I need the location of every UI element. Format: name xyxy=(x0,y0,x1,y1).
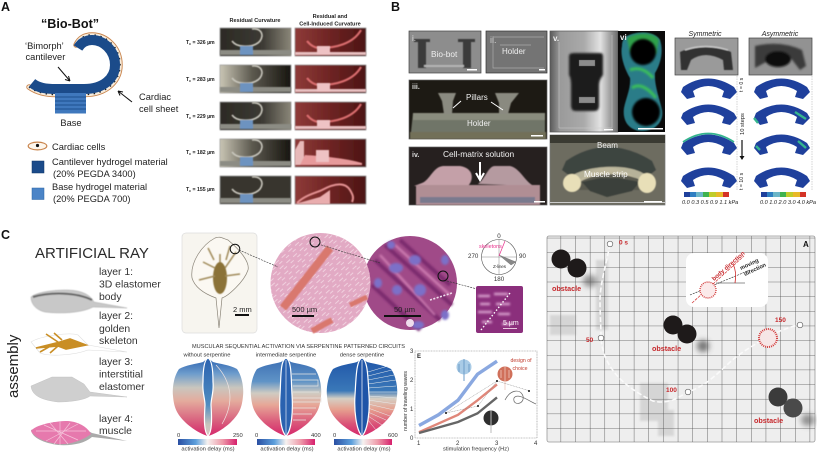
shaded trail xyxy=(550,260,674,436)
photo iv: cell-matrix solution: iv. xyxy=(412,152,419,159)
obstacle bottom right xyxy=(754,388,815,426)
layer 3 text: layer 3: xyxy=(99,357,133,368)
annotation: design of choice: design of xyxy=(510,358,532,364)
time axis labels and arrow xyxy=(737,76,812,190)
row labels: c xyxy=(189,42,191,46)
layer 1 text: body xyxy=(99,292,122,303)
panel letter B: B xyxy=(391,0,400,14)
label: bimorph cantilever: ‘Bimorph’ xyxy=(25,41,64,51)
column heading: residual and cell-induced curvature: Cell-Induced Curvature xyxy=(299,22,361,28)
time axis labels and arrow: t = 0 s xyxy=(739,77,745,92)
panel: C artificial ray assembly xyxy=(1,228,161,445)
row labels: T xyxy=(186,77,189,83)
icon: cantilever swatch xyxy=(32,161,44,173)
label: assembly: assembly xyxy=(5,334,22,398)
time labels xyxy=(586,240,786,394)
label: cardiac cell sheet: cell sheet xyxy=(139,104,179,114)
row labels: = 182 µm xyxy=(191,150,215,156)
icon: dark ray xyxy=(484,410,498,433)
arrow to cantilever xyxy=(58,67,70,81)
row labels: c xyxy=(189,189,191,193)
map: dense serpentine xyxy=(327,358,397,436)
polar plot: 270 xyxy=(468,253,479,260)
chart label E: E xyxy=(417,354,421,360)
icon: base swatch xyxy=(32,188,44,200)
panel: A bio-bot diagram xyxy=(1,0,179,204)
panel letter C: C xyxy=(1,228,10,242)
axis tick labels: 4 xyxy=(534,441,538,447)
subheading: without serpentine: without serpentine xyxy=(182,352,231,358)
legend text: cantilever hydrogel: Cantilever hydrogel material xyxy=(52,157,168,167)
polar plot: Z-lines xyxy=(493,264,507,269)
photo: beam and muscle strip: Muscle strip xyxy=(584,170,628,179)
row labels: T xyxy=(186,150,189,156)
FEM frames: asymmetric xyxy=(754,78,810,188)
axis tick labels: 1 xyxy=(417,441,421,447)
photo iii: pillars on holder: Holder xyxy=(467,119,491,128)
color scale: intermediate serpentine: 400 xyxy=(311,433,321,439)
map: intermediate serpentine xyxy=(251,358,321,436)
photo vi: fluorescence: vi xyxy=(620,33,627,42)
subheading: intermediate serpentine: intermediate serpentine xyxy=(256,352,316,358)
chart: traveling waves vs stimulation frequency xyxy=(403,349,538,452)
photo i: bio-bot xyxy=(409,31,481,73)
icon: cardiac cell xyxy=(28,142,47,150)
layer 1 illustration xyxy=(31,290,127,313)
layer 2 text: layer 2: xyxy=(99,311,133,322)
color bar: asymmetric xyxy=(760,192,816,206)
photo: beam and muscle strip: Beam xyxy=(597,141,618,150)
color scale: dense serpentine xyxy=(333,433,398,452)
icon: red ray xyxy=(498,366,512,390)
row labels: c xyxy=(189,116,191,120)
panel: C microscope images xyxy=(182,233,526,333)
series: grey xyxy=(419,397,497,433)
layer 4 text: muscle xyxy=(99,426,132,437)
time axis labels and arrow: 10 steps xyxy=(740,113,746,135)
heading: symmetric: Symmetric xyxy=(688,31,722,38)
panel: C robot trajectory on grid xyxy=(547,236,815,442)
trajectory xyxy=(600,244,800,402)
color scale: without serpentine xyxy=(177,433,243,452)
color scale: dense serpentine: 600 xyxy=(388,433,398,439)
column heading: residual curvature: Residual Curvature xyxy=(230,18,280,24)
photo iii: pillars on holder: Pillars xyxy=(466,93,488,102)
time labels: 50 xyxy=(586,337,594,344)
color bar: symmetric: 0.0 0.3 0.5 0.9 1.1 kPa xyxy=(682,200,738,206)
inset: body and moving direction: body direction xyxy=(711,251,747,283)
row labels: c xyxy=(189,152,191,156)
photo v: top view xyxy=(550,31,618,132)
FEM frames: symmetric xyxy=(681,78,737,188)
markers xyxy=(445,380,530,414)
legend text: cantilever hydrogel: (20% PEGDA 3400) xyxy=(53,169,136,179)
row labels: c xyxy=(189,79,191,83)
layer 2 illustration xyxy=(31,333,127,355)
photo: ray specimen xyxy=(182,233,257,333)
obstacle centre xyxy=(652,316,709,353)
layer 3 text: interstitial xyxy=(99,370,143,380)
obstacle top left: obstacle xyxy=(552,284,581,293)
obstacle bottom right: obstacle xyxy=(754,416,783,425)
time axis labels and arrow: t = 10 s xyxy=(739,172,745,190)
photo iv: cell-matrix solution xyxy=(409,147,547,205)
panel: B symmetric and asymmetric simulation xyxy=(675,31,816,206)
heading: artificial ray: ARTIFICIAL RAY xyxy=(35,245,149,262)
inset: body and moving direction xyxy=(686,251,768,307)
panel: A photo grid xyxy=(186,14,366,204)
heading: muscular sequential activation: MUSCULAR SEQUENTIAL ACTIVATION VIA SERPENTINE PATTERNED CIRCUITS xyxy=(192,344,406,350)
label: base: Base xyxy=(60,118,82,128)
axis tick labels: 2 xyxy=(410,378,414,384)
obstacle top left xyxy=(552,250,597,293)
legend text: cardiac cells: Cardiac cells xyxy=(52,142,106,152)
column heading: residual and cell-induced curvature: Residual and xyxy=(313,14,348,20)
circle: magenta muscle micrograph xyxy=(363,236,457,330)
circle: pink tissue micrograph: 500 µm xyxy=(292,305,317,314)
layer 1 text: layer 1: xyxy=(99,267,133,278)
photo vi: fluorescence xyxy=(618,31,665,132)
photo ii: holder xyxy=(486,31,547,73)
polar plot xyxy=(468,233,526,283)
subheading: dense serpentine: dense serpentine xyxy=(340,352,384,358)
photo iii: pillars on holder: iii. xyxy=(412,84,420,91)
axis tick labels: 2 xyxy=(456,441,460,447)
obstacle centre: obstacle xyxy=(652,344,681,353)
color scale: without serpentine: 250 xyxy=(233,433,243,439)
legend text: base hydrogel: (20% PEGDA 700) xyxy=(53,194,131,204)
polar plot: skeletons xyxy=(479,244,502,250)
heading: Bio-Bot: “Bio-Bot” xyxy=(41,17,99,31)
photo ii: holder: ii. xyxy=(490,35,496,45)
row labels: = 326 µm xyxy=(191,40,215,46)
icon: blue ray xyxy=(456,359,472,381)
layer 4 text: layer 4: xyxy=(99,414,133,425)
panel letter A: A xyxy=(1,0,10,14)
layer 2 text: golden xyxy=(99,324,130,335)
layer 3 text: elastomer xyxy=(99,382,145,393)
series: red xyxy=(419,384,497,432)
inset: high magnification magenta xyxy=(476,286,523,333)
annotation: trajectory sketches xyxy=(446,381,536,413)
color scale: intermediate serpentine: 0 xyxy=(255,433,258,439)
time labels: 150 xyxy=(775,317,786,324)
color scale: without serpentine: 0 xyxy=(177,433,180,439)
annotation: design of choice: choice xyxy=(512,366,528,372)
photo i: bio-bot: Bio-bot xyxy=(431,49,458,59)
axis title: y: number of traveling waves xyxy=(403,371,409,431)
row labels: = 283 µm xyxy=(191,77,215,83)
panel: B biobot fabrication photos xyxy=(391,0,665,205)
row labels: = 229 µm xyxy=(191,114,215,120)
base block xyxy=(55,93,86,114)
row labels xyxy=(186,40,215,193)
color bar: symmetric xyxy=(682,192,738,206)
label: cardiac cell sheet: Cardiac xyxy=(139,92,171,102)
inset: body and moving direction: moving xyxy=(739,258,760,272)
color scale: dense serpentine: 0 xyxy=(333,433,336,439)
photo i: bio-bot: i. xyxy=(412,34,416,43)
layer 4 illustration xyxy=(31,421,127,445)
legend text: base hydrogel: Base hydrogel material xyxy=(52,182,147,192)
dashed connectors xyxy=(239,244,477,289)
polar plot: 180 xyxy=(494,276,505,283)
layer 2 text: skeleton xyxy=(99,336,138,347)
layer 1 text: 3D elastomer xyxy=(99,280,161,290)
photo: asymmetric xyxy=(749,38,812,75)
row labels: = 155 µm xyxy=(191,187,215,193)
series: blue xyxy=(419,361,497,426)
circle: pink tissue micrograph xyxy=(270,233,370,333)
color bar: asymmetric: 0.0 1.0 2.0 3.0 4.0 kPa xyxy=(760,200,816,206)
photo: beam and muscle strip xyxy=(550,135,665,205)
photos: residual curvature column xyxy=(220,28,291,204)
inset: high magnification magenta: 5 µm xyxy=(503,320,519,327)
photo iv: cell-matrix solution: Cell-matrix solution xyxy=(443,149,515,159)
label: bimorph cantilever: cantilever xyxy=(26,52,65,62)
arrow to cell sheet xyxy=(118,91,132,102)
axis tick labels: 0 xyxy=(410,436,414,442)
label A: A xyxy=(803,240,809,249)
swimming ray snapshot xyxy=(758,328,778,348)
axis tick labels xyxy=(410,349,538,447)
polar plot: 90 xyxy=(519,253,526,260)
layer 3 illustration xyxy=(31,377,127,402)
circle: magenta muscle micrograph: 50 µm xyxy=(394,305,415,314)
photo iii: pillars on holder xyxy=(409,80,547,139)
time labels: 100 xyxy=(666,387,677,394)
time labels: 0 s xyxy=(619,240,628,246)
row labels: T xyxy=(186,114,189,120)
photo ii: holder: Holder xyxy=(502,47,526,56)
axis tick labels: 3 xyxy=(410,349,414,355)
time markers xyxy=(598,241,803,395)
panel: C serpentine activation maps xyxy=(173,344,406,452)
photo v: top view: v. xyxy=(553,34,559,43)
photo: symmetric xyxy=(675,38,738,75)
map: without serpentine xyxy=(173,358,243,436)
color scale: intermediate serpentine xyxy=(255,433,321,452)
legend xyxy=(28,142,168,204)
row labels: T xyxy=(186,40,189,46)
photos: cell-induced curvature column xyxy=(295,28,366,204)
axis tick labels: 1 xyxy=(410,407,414,413)
photo: ray specimen: 2 mm xyxy=(233,305,252,314)
heading: asymmetric: Asymmetric xyxy=(761,31,799,38)
axis tick labels: 3 xyxy=(495,441,499,447)
polar plot: 0 xyxy=(497,233,501,240)
diagram: cantilever and cell sheet xyxy=(29,35,120,114)
inset: body and moving direction: direction xyxy=(743,262,768,278)
row labels: T xyxy=(186,187,189,193)
